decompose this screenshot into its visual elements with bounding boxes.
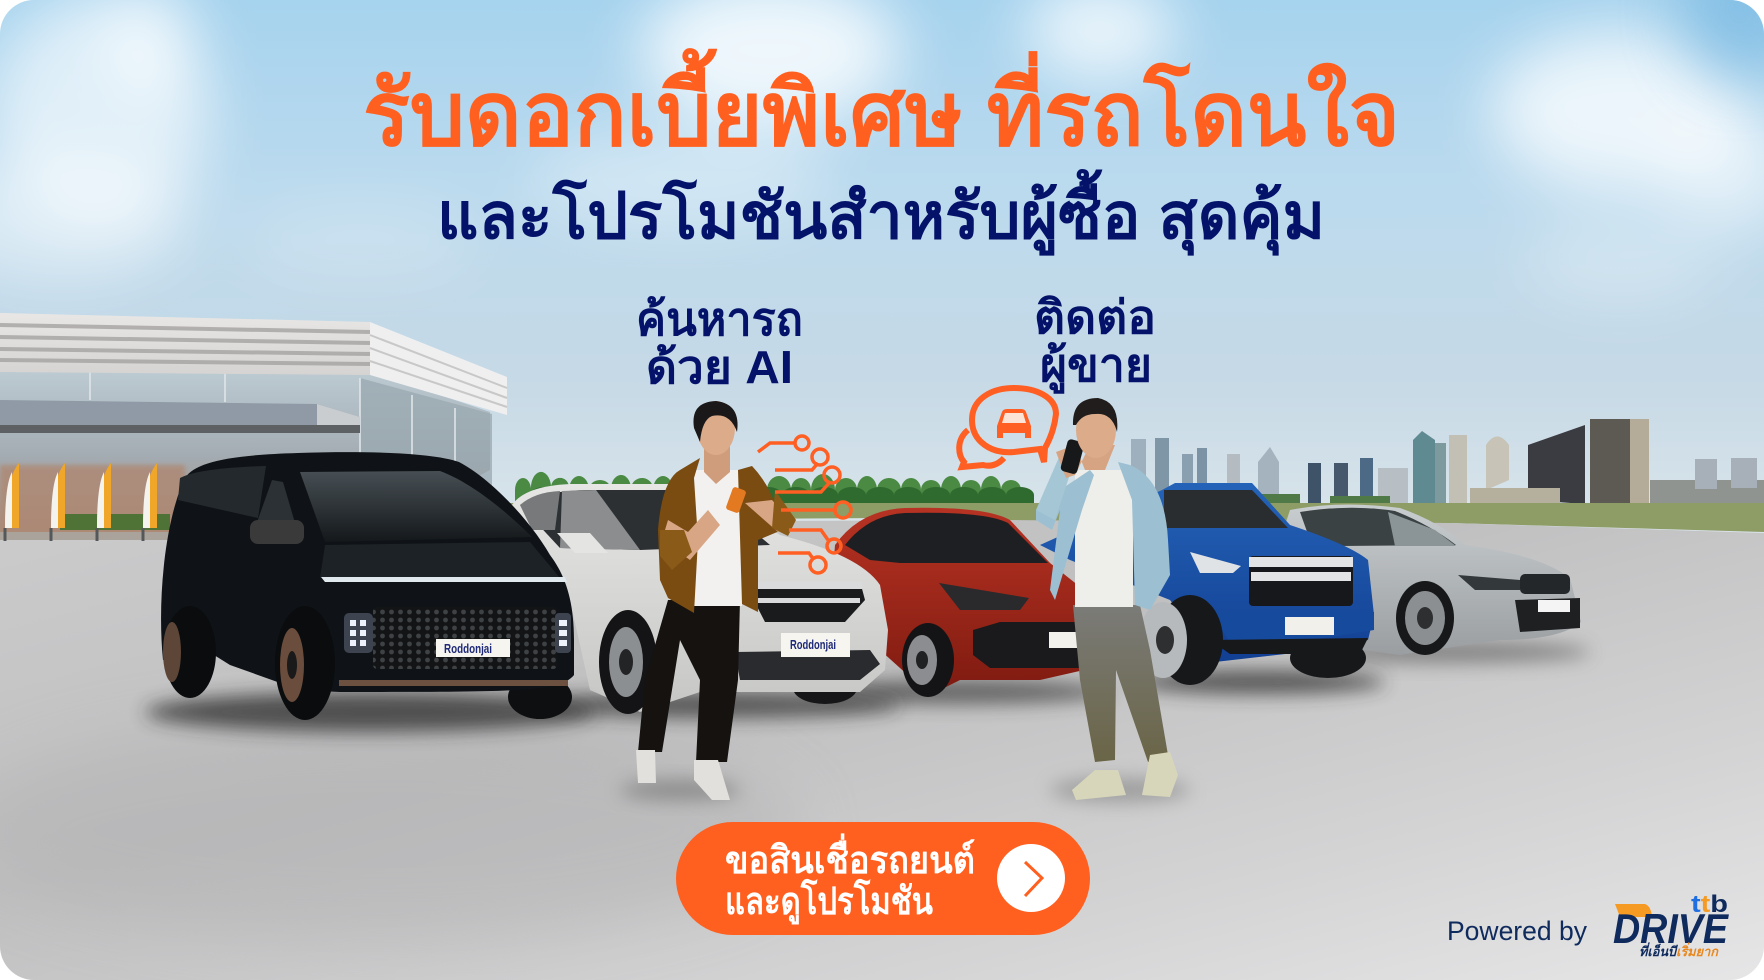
car: black van — [145, 452, 595, 732]
ground shading — [228, 790, 766, 924]
icon: AI circuit lines — [758, 436, 851, 573]
label: search with AI: ค้นหารถ — [636, 293, 803, 345]
subtitle: และโปรโมชันสำหรับผู้ซื้อ สุดคุ้ม — [437, 169, 1325, 256]
jacket — [658, 458, 782, 613]
car: blue pickup — [1040, 483, 1385, 694]
van headlights — [344, 613, 571, 653]
building glass — [0, 372, 490, 540]
building — [0, 313, 507, 541]
logo: ttb drive — [1613, 891, 1730, 959]
tee — [1075, 470, 1133, 607]
van plate: Roddonjai — [444, 641, 492, 656]
van grille — [373, 607, 557, 669]
label: contact seller — [1034, 291, 1156, 394]
grass strip — [500, 503, 1764, 532]
phone — [1060, 438, 1085, 475]
car: white SUV — [512, 484, 900, 718]
trousers — [638, 600, 740, 762]
car: grey sedan — [1280, 504, 1590, 663]
label: search with AI: ด้วย AI — [646, 341, 793, 393]
building roof side — [370, 322, 507, 415]
head — [1076, 402, 1116, 458]
car glyph — [997, 409, 1031, 438]
label: contact seller: ผู้ขาย — [1040, 339, 1152, 394]
neck and head — [704, 445, 730, 484]
label: search with AI — [636, 293, 803, 393]
hand and neck — [1056, 445, 1115, 478]
button text: และดูโปรโมชัน — [725, 878, 933, 925]
clouds — [0, 0, 1764, 300]
logo: ttb drive: ttb — [1691, 891, 1728, 918]
building roof front — [0, 313, 370, 375]
man searching with phone — [620, 401, 796, 800]
forearm — [1036, 455, 1072, 520]
skyline — [1131, 419, 1764, 505]
powered by: Powered by — [1447, 916, 1587, 946]
hedge — [60, 514, 170, 530]
flags — [5, 463, 157, 541]
forecourt kerb — [0, 532, 175, 540]
phone — [726, 487, 746, 513]
label: contact seller: ติดต่อ — [1034, 291, 1156, 343]
jacket — [1036, 462, 1170, 610]
sky corner tint — [1680, 0, 1764, 80]
trousers — [1073, 605, 1168, 762]
canopy — [0, 400, 360, 425]
car: red hatchback — [810, 508, 1110, 704]
building brick reflection — [0, 465, 185, 535]
background sky — [0, 0, 1764, 540]
tee — [694, 470, 742, 606]
button text — [725, 833, 975, 925]
shoes — [1072, 752, 1178, 800]
button: apply for car loan — [676, 822, 1090, 935]
title: รับดอกเบี้ยพิเศษ ที่รถโดนใจ — [363, 48, 1400, 165]
shoes — [636, 750, 730, 800]
logo: ttb drive: DRIVE — [1613, 905, 1730, 952]
tree line — [515, 472, 1034, 505]
icon: arrow circle — [997, 844, 1065, 912]
plate text: Roddonjai — [790, 637, 836, 652]
ground — [0, 520, 1764, 980]
button text: ขอสินเชื่อรถยนต์ — [725, 833, 975, 882]
right forearm and cuff — [745, 500, 779, 532]
icon: chat bubble with car — [959, 388, 1056, 467]
left sleeve cuff and forearm — [662, 510, 720, 560]
logo: ttb drive: ที่เอ็นบีเริ่มยาก — [1639, 942, 1719, 959]
man on the phone — [1036, 398, 1190, 802]
